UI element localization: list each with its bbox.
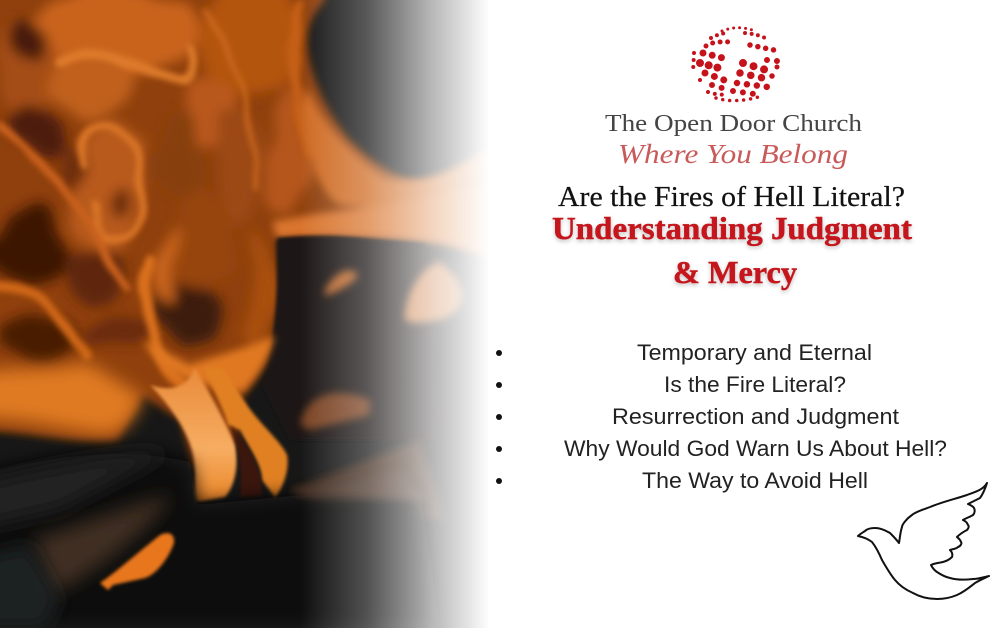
logo: The Open Door Church [605,28,862,169]
icon: dotted globe with cross [693,28,777,101]
heading: understanding judgment and mercy: Understanding Judgment [552,210,912,246]
bullet list: Temporary and Eternal [637,340,872,365]
glowing ember [100,533,174,590]
icon: dove outline [858,483,989,599]
low flame band at left [0,362,143,434]
bright flame legs [143,335,288,502]
flame mass [0,0,490,470]
swirling tones in the flames [0,0,314,357]
bullet list [496,340,947,493]
bullet list: The Way to Avoid Hell [642,468,868,493]
heading: question: Are the Fires of Hell Literal? [558,182,905,213]
tail of the flame sweeping right [272,90,490,258]
organization name: The Open Door Church [605,111,862,137]
bullet list: Resurrection and Judgment [612,404,899,429]
tagline script: Where You Belong [618,139,848,169]
white fade overlay [300,0,490,628]
flame wisps [0,5,310,385]
heading: understanding judgment and mercy [552,210,912,290]
bullet list: Is the Fire Literal? [664,372,846,397]
panel: fire photograph fading to white [0,0,518,628]
small distant flames [290,262,462,520]
heading: understanding judgment and mercy: & Mercy [673,254,797,290]
bullet list: Why Would God Warn Us About Hell? [564,436,947,461]
charred logs [0,452,440,628]
dark log block behind flames [262,236,440,440]
